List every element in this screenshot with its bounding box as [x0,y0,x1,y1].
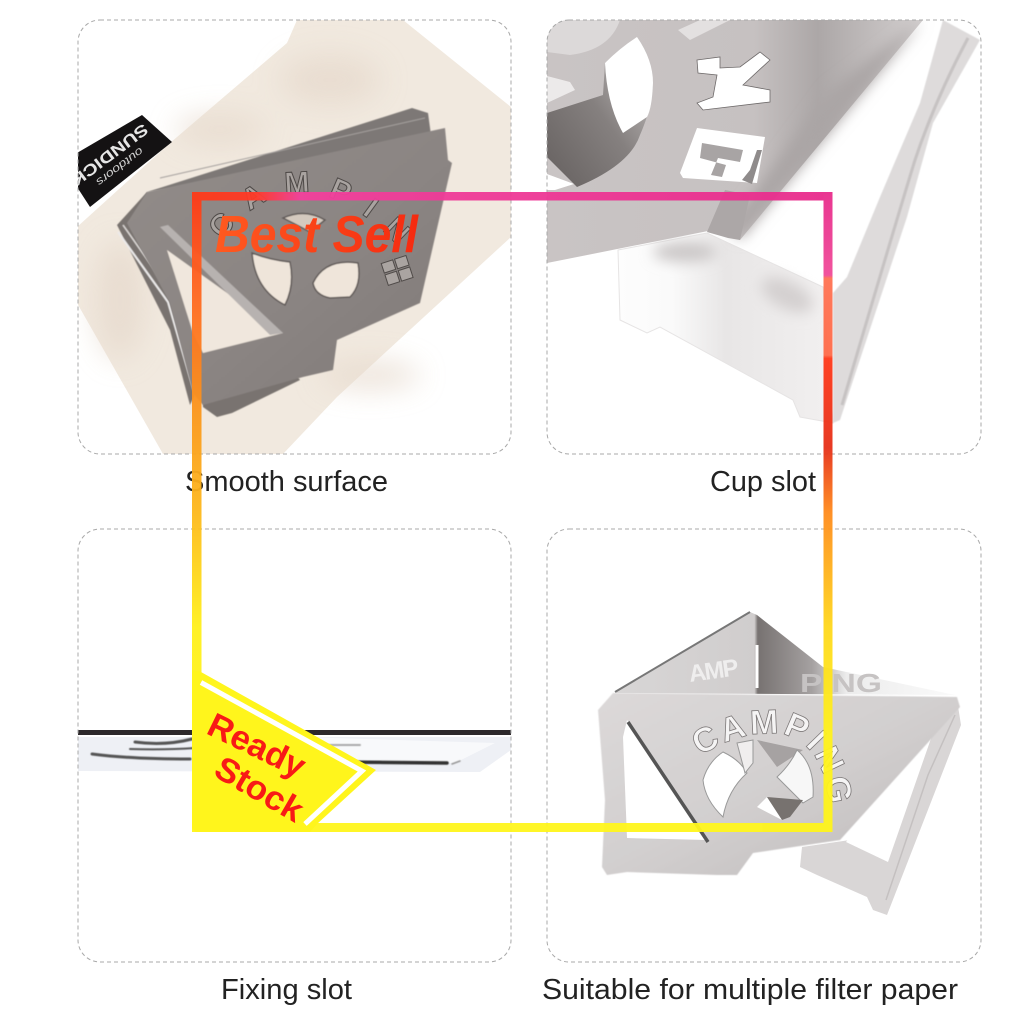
panel: cup slot photo [547,20,980,423]
caption: fixing slot: Fixing slot [221,974,352,1006]
rear plate ghost letters right: PING [800,668,882,698]
panel border: filter paper [547,529,981,962]
upper metal plate [547,20,923,263]
lower metal plate [618,233,833,423]
front plate [598,693,960,875]
ribbon white chevron [201,682,362,824]
ribbon background [192,670,376,832]
caption: cup slot: Cup slot [710,466,816,498]
ribbon label: stock: Stock [208,749,310,830]
rear plate ghost letters: AMP [687,654,740,688]
stacked metal plates behind [117,108,431,417]
shadowed interior of round cut-out [547,64,647,187]
rear plate slit [756,645,758,688]
panel border: cup slot [547,20,981,454]
panel border: fixing slot [78,529,511,962]
triangular window [623,720,707,840]
window slot edge [628,722,708,842]
angled side arm [833,20,980,423]
white lobe cut-out [605,37,653,133]
main metal plate with cut-outs [127,128,452,405]
dark rear ridge [615,612,750,692]
engraved word on front plate: CAMPING [693,709,852,802]
best sell badge: Best Sell [215,206,419,264]
small square logo [381,256,413,285]
caption: filter paper: Suitable for multiple filter paper [542,974,958,1006]
letter N cut-out [697,52,770,110]
caption: smooth surface: Smooth surface [185,466,388,498]
round logo lobes [703,740,813,820]
panel: smooth surface photo [78,20,511,454]
gradient promo frame [192,192,832,832]
rear plate of cone [615,612,955,695]
panel: filter paper photo [598,611,961,915]
black brand tag: SUNDICK [67,120,151,189]
plate highlight [320,738,494,762]
ribbon label: ready: Ready [201,706,312,786]
dark reflections [92,739,460,764]
panel: fixing slot photo [78,730,511,772]
dark top edge [78,730,511,735]
black brand tag: outdoors [93,145,145,188]
metal plate seen edge-on [78,737,511,772]
arm inner edge highlight [842,38,968,405]
cloth pouch [77,20,511,454]
cloth shading [95,55,420,389]
ready stock corner ribbon [192,670,376,832]
partial letter cut-out [678,20,730,40]
black brand tag [78,115,172,207]
panel border: smooth surface [78,20,511,454]
rear folding arm [800,700,961,915]
letter G cut-out [680,128,765,184]
round cut-out fragments [547,20,620,55]
